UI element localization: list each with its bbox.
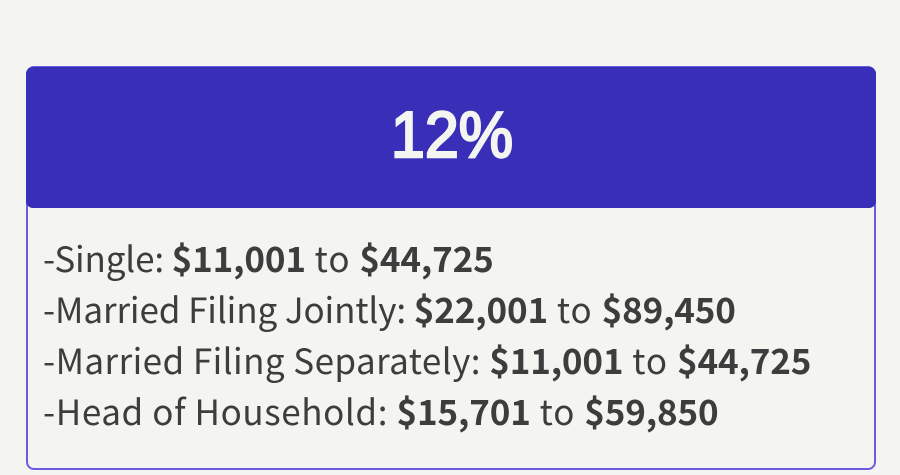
text block: married filing jointly: -Married Filing Jointly: $22,001 to $89,450 <box>43 283 736 334</box>
text block: single: -Single: $11,001 to $44,725 <box>43 232 494 283</box>
heading: rate: 12% <box>391 98 513 171</box>
text block: head of household: -Head of Household: $15,701 to $59,850 <box>43 385 719 436</box>
text block: married filing separately: -Married Filing Separately: $11,001 to $44,725 <box>43 334 811 385</box>
panel: header band <box>26 67 876 208</box>
